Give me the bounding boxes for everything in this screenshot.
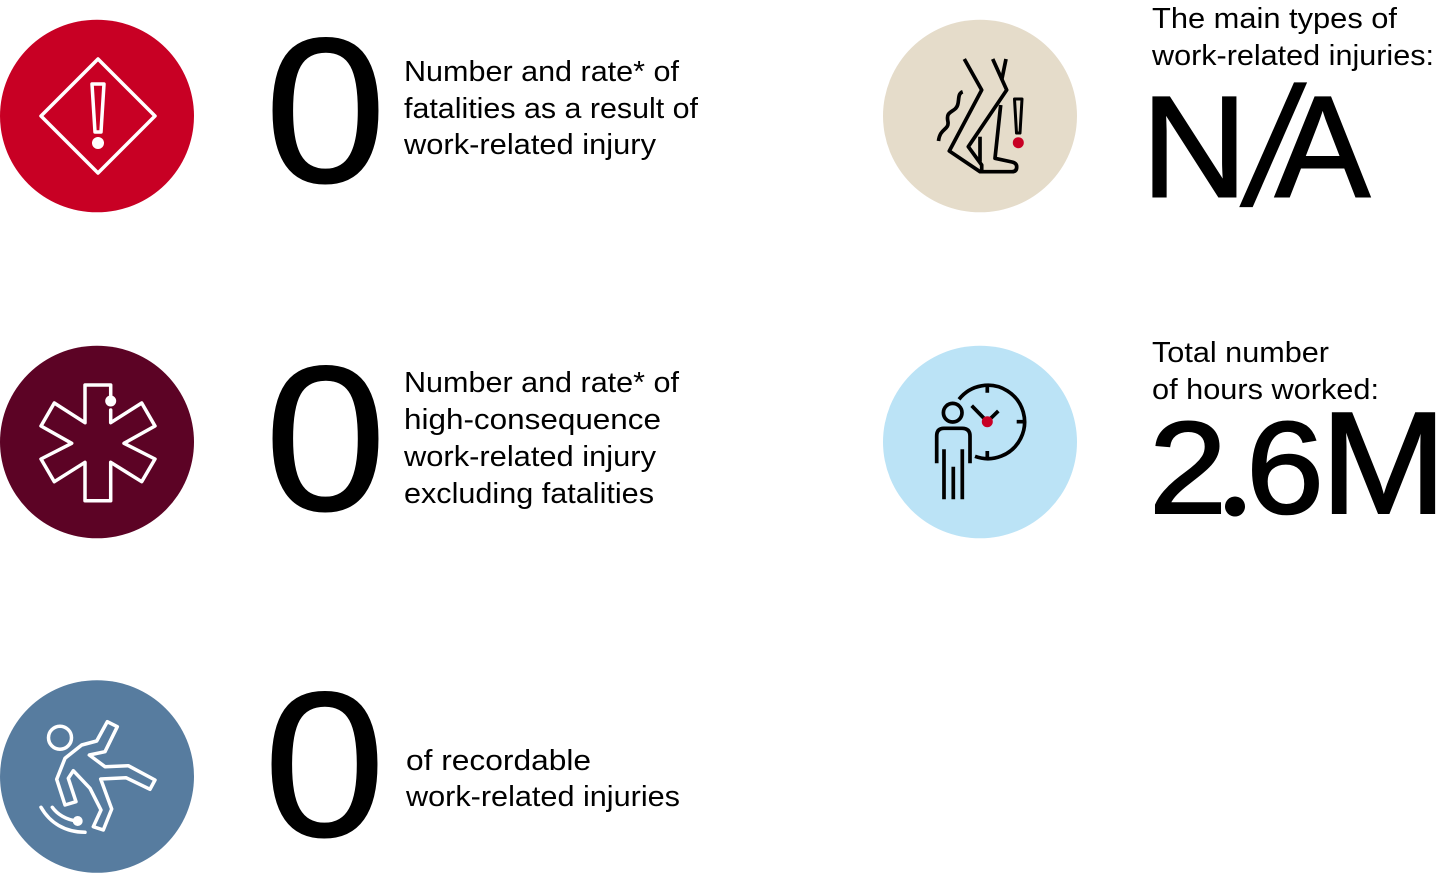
text: hours heading: Total number [1152,337,1329,369]
text: high-consequence description: work-related injury [403,441,657,473]
value: 2.6M: 2 [1149,394,1227,541]
value: 2.6M: . [1220,413,1250,536]
text: high-consequence description: excluding fatalities [404,478,654,510]
panel: main injury types [883,3,1434,242]
value: 2.6M [1149,382,1446,544]
panel: fatalities [0,0,699,226]
text: main types heading: work-related injuries: [1151,40,1434,72]
text: fatalities description: Number and rate* of [404,56,680,88]
text: fatalities description: work-related injury [403,129,657,161]
value: N/A: A [1275,66,1370,228]
text: main types heading [1151,3,1434,72]
text: fatalities description [403,56,699,161]
value: N/A: / [1233,53,1312,242]
value: N/A: N [1141,66,1247,228]
icon: person and clock [883,346,1077,538]
text: recordable description [405,745,680,813]
icon: warning diamond [0,20,194,212]
icon: legs with alert [883,20,1077,212]
panel: recordable injuries [0,649,680,880]
panel: high-consequence injury [0,323,680,554]
value: 2.6M: M [1320,382,1446,544]
text: recordable description: work-related injuries [405,781,680,813]
text: hours heading: of hours worked: [1152,374,1379,406]
icon: falling person [0,680,194,873]
text: main types heading: The main types of [1152,3,1398,35]
icon: medical star [0,346,194,538]
panel: hours worked [883,337,1446,544]
number: zero fatalities: 0 [264,0,386,226]
value: N/A [1141,53,1370,242]
text: high-consequence description: Number and rate* of [404,367,680,399]
number: zero high-consequence injuries: 0 [264,323,386,554]
value: 2.6M: 6 [1246,394,1324,541]
text: fatalities description: fatalities as a result of [404,93,699,125]
text: hours heading [1152,337,1379,406]
text: recordable description: of recordable [406,745,591,777]
number: zero recordable injuries: 0 [264,649,386,880]
text: high-consequence description [403,367,680,510]
text: high-consequence description: high-consequence [404,404,661,436]
